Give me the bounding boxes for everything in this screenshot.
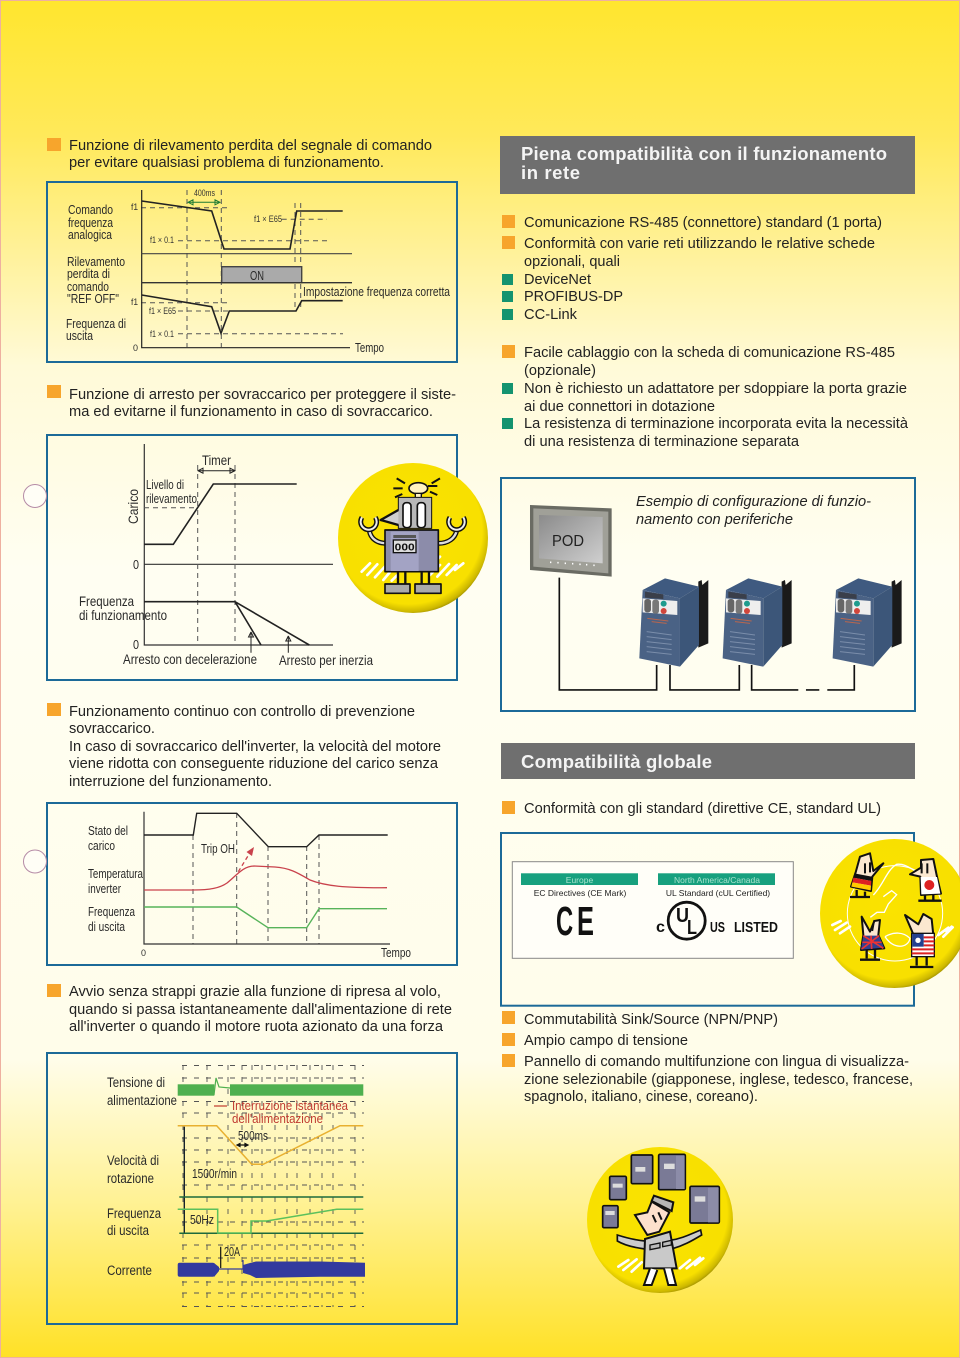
panel: command loss timing chart: comando — [67, 280, 109, 294]
panel: command loss timing chart: ON — [250, 269, 264, 283]
list: additional features — [502, 1011, 913, 1105]
list: network features — [502, 215, 909, 450]
panel: overload timer chart: 0 — [133, 638, 139, 652]
panel: certifications: LISTED — [734, 919, 778, 936]
panel: overload prevention chart: Frequenza — [88, 905, 135, 919]
heading: network compatibility — [500, 136, 915, 194]
panel: command loss timing chart: f1 × E65 — [149, 306, 176, 316]
panel: power interruption chart: Interruzione istantanea — [232, 1099, 348, 1113]
panel: power interruption chart: 20A — [224, 1245, 240, 1259]
panel: command loss timing chart: f1 × 0.1 — [150, 329, 174, 339]
icon: worker juggling inverters badge — [587, 1147, 733, 1293]
section: flying restart text: all'inverter o quando il motore ruota azionato da una forza — [69, 1019, 444, 1035]
section: overload stop text: Funzione di arresto per sovraccarico per proteggere il siste- — [69, 387, 456, 403]
panel: overload timer chart: rilevamento — [146, 492, 197, 506]
panel: overload prevention chart: Stato del — [88, 824, 128, 838]
panel: overload timer chart: Livello di — [146, 478, 184, 492]
punch hole 1 — [24, 484, 46, 508]
section: continuous operation text: sovraccarico. — [69, 721, 155, 737]
panel: power interruption chart: 1500r/min — [192, 1167, 237, 1181]
panel: certifications: EC Directives (CE Mark) — [534, 888, 626, 898]
section: continuous operation text: viene ridotta con conseguente riduzione del carico senza — [69, 756, 439, 772]
panel: overload timer chart: Arresto con decelerazione — [123, 651, 257, 667]
panel: command loss timing chart: Rilevamento — [67, 255, 125, 269]
panel: certifications: US — [710, 919, 725, 936]
list: additional features: Commutabilità Sink/Source (NPN/PNP) — [524, 1012, 778, 1028]
list: network features: Conformità con varie reti utilizzando le relative schede — [524, 236, 875, 252]
section: continuous operation text: Funzionamento continuo con controllo di prevenzione — [69, 704, 415, 720]
panel: overload prevention chart — [47, 803, 457, 965]
list: network features: (opzionale) — [524, 363, 596, 379]
panel: overload timer chart: 0 — [133, 558, 139, 572]
panel: overload timer chart — [47, 435, 457, 680]
panel: overload prevention chart: di uscita — [88, 920, 125, 934]
icon: robot badge: 000 — [395, 542, 415, 553]
heading: global compatibility — [501, 743, 915, 779]
panel: power interruption chart: Velocità di — [107, 1153, 159, 1168]
panel: network configuration example: namento con periferiche — [636, 512, 793, 528]
panel: command loss timing chart: Frequenza di — [66, 317, 126, 331]
panel: command loss timing chart: f1 × E65 — [254, 214, 282, 224]
panel: certifications: UL Standard (cUL Certified) — [666, 888, 770, 898]
section: signal loss detection text: Funzione di rilevamento perdita del segnale di comando — [69, 138, 432, 154]
section: flying restart text: Avvio senza strappi grazie alla funzione di ripresa al volo, — [69, 984, 441, 1000]
panel: command loss timing chart: frequenza — [68, 216, 113, 230]
list: additional features: Pannello di comando multifunzione con lingua di visualizza- — [524, 1054, 909, 1070]
panel: overload timer chart: di funzionamento — [79, 607, 167, 623]
panel: power interruption chart: Corrente — [107, 1263, 152, 1278]
list: network features: La resistenza di terminazione incorporata evita la necessità — [524, 416, 909, 432]
list: network features: ai due connettori in dotazione — [524, 399, 715, 415]
panel: command loss timing chart: "REF OFF" — [67, 292, 119, 306]
panel: command loss timing chart: perdita di — [67, 267, 110, 281]
panel: network configuration example — [501, 478, 915, 711]
icon: robot badge — [338, 463, 488, 613]
panel: command loss timing chart: Impostazione frequenza corretta — [303, 285, 450, 299]
panel: power interruption chart: Frequenza — [107, 1206, 161, 1221]
section: signal loss detection text: per evitare qualsiasi problema di funzionamento. — [69, 155, 384, 171]
panel: command loss timing chart: uscita — [66, 329, 93, 343]
list: network features: DeviceNet — [524, 272, 591, 288]
panel: overload timer chart: Carico — [125, 489, 141, 524]
panel: overload prevention chart: Temperatura — [88, 867, 143, 881]
text: standards conformity: Conformità con gli standard (direttive CE, standard UL) — [524, 801, 881, 817]
heading: network compatibility: in rete — [521, 162, 580, 183]
list: additional features: zione selezionabile (giapponese, inglese, tedesco, francese, — [524, 1072, 913, 1088]
panel: command loss timing chart — [47, 182, 457, 362]
panel: certifications: L — [687, 917, 697, 939]
section: continuous operation text: interruzione del funzionamento. — [69, 774, 272, 790]
panel: certifications: Europe — [566, 875, 593, 885]
panel: command loss timing chart: 400ms — [194, 188, 215, 198]
section: continuous operation text — [47, 703, 441, 790]
panel: command loss timing chart: Tempo — [355, 341, 384, 355]
list: network features: di una resistenza di terminazione separata — [524, 434, 800, 450]
panel: overload prevention chart: carico — [88, 839, 115, 853]
heading: global compatibility: Compatibilità globale — [521, 751, 712, 772]
section: flying restart text — [47, 984, 452, 1035]
panel: certifications: c — [656, 919, 665, 936]
panel: command loss timing chart: f1 × 0.1 — [150, 235, 174, 245]
section: signal loss detection text — [47, 138, 432, 171]
punch hole 2 — [24, 850, 46, 873]
panel: certifications: U — [676, 905, 689, 927]
section: flying restart text: quando si passa istantaneamente dall'alimentazione di rete — [69, 1002, 452, 1018]
panel: power interruption chart: di uscita — [107, 1223, 149, 1238]
panel: certifications: E — [577, 899, 594, 945]
panel: network configuration example: POD — [552, 533, 584, 550]
panel: command loss timing chart: f1 — [131, 202, 138, 212]
figure: germany — [850, 853, 883, 897]
panel: overload prevention chart: Trip OH — [201, 842, 235, 856]
panel: certifications — [501, 833, 914, 1006]
section: overload stop text — [47, 385, 456, 420]
panel: power interruption chart — [47, 1053, 457, 1324]
panel: overload timer chart: Arresto per inerzia — [279, 652, 373, 668]
panel: overload prevention chart: inverter — [88, 882, 121, 896]
panel: command loss timing chart: analogica — [68, 228, 112, 242]
panel: overload prevention chart: 0 — [141, 948, 146, 958]
list: additional features: Ampio campo di tensione — [524, 1033, 688, 1049]
panel: command loss timing chart: Comando — [68, 203, 113, 217]
panel: command loss timing chart: 0 — [133, 343, 138, 353]
panel: command loss timing chart: f1 — [131, 297, 138, 307]
section: overload stop text: ma ed evitarne il funzionamento in caso di sovraccarico. — [69, 404, 433, 420]
panel: overload timer chart: Frequenza — [79, 593, 134, 609]
panel: power interruption chart: 500ms — [238, 1129, 268, 1143]
figure: uk — [860, 917, 884, 960]
icon: globe badge with people — [820, 839, 960, 988]
panel: overload prevention chart: Tempo — [381, 946, 411, 960]
panel: power interruption chart: 50Hz — [190, 1213, 214, 1227]
list: network features: opzionali, quali — [524, 254, 620, 270]
figure: japan — [910, 859, 942, 901]
list: network features: CC-Link — [524, 307, 578, 323]
panel: overload timer chart: Timer — [202, 452, 231, 468]
figure: usa — [905, 914, 934, 967]
list: network features: Comunicazione RS-485 (connettore) standard (1 porta) — [524, 215, 882, 231]
section: continuous operation text: In caso di sovraccarico dell'inverter, la velocità del motore — [69, 739, 441, 755]
panel: power interruption chart: dell'alimentazione — [232, 1112, 323, 1126]
panel: certifications: C — [556, 900, 573, 945]
heading: network compatibility: Piena compatibilità con il funzionamento — [521, 143, 887, 164]
panel: power interruption chart: Tensione di — [107, 1075, 165, 1090]
panel: certifications: North America/Canada — [674, 875, 760, 885]
list: network features: PROFIBUS-DP — [524, 289, 623, 305]
panel: network configuration example: Esempio di configurazione di funzio- — [636, 494, 871, 510]
list: additional features: spagnolo, italiano, cinese, coreano). — [524, 1089, 758, 1105]
panel: power interruption chart: rotazione — [107, 1171, 154, 1186]
list: network features: Non è richiesto un adattatore per sdoppiare la porta grazie — [524, 381, 907, 397]
panel: power interruption chart: alimentazione — [107, 1093, 177, 1108]
list: network features: Facile cablaggio con la scheda di comunicazione RS-485 — [524, 345, 895, 361]
